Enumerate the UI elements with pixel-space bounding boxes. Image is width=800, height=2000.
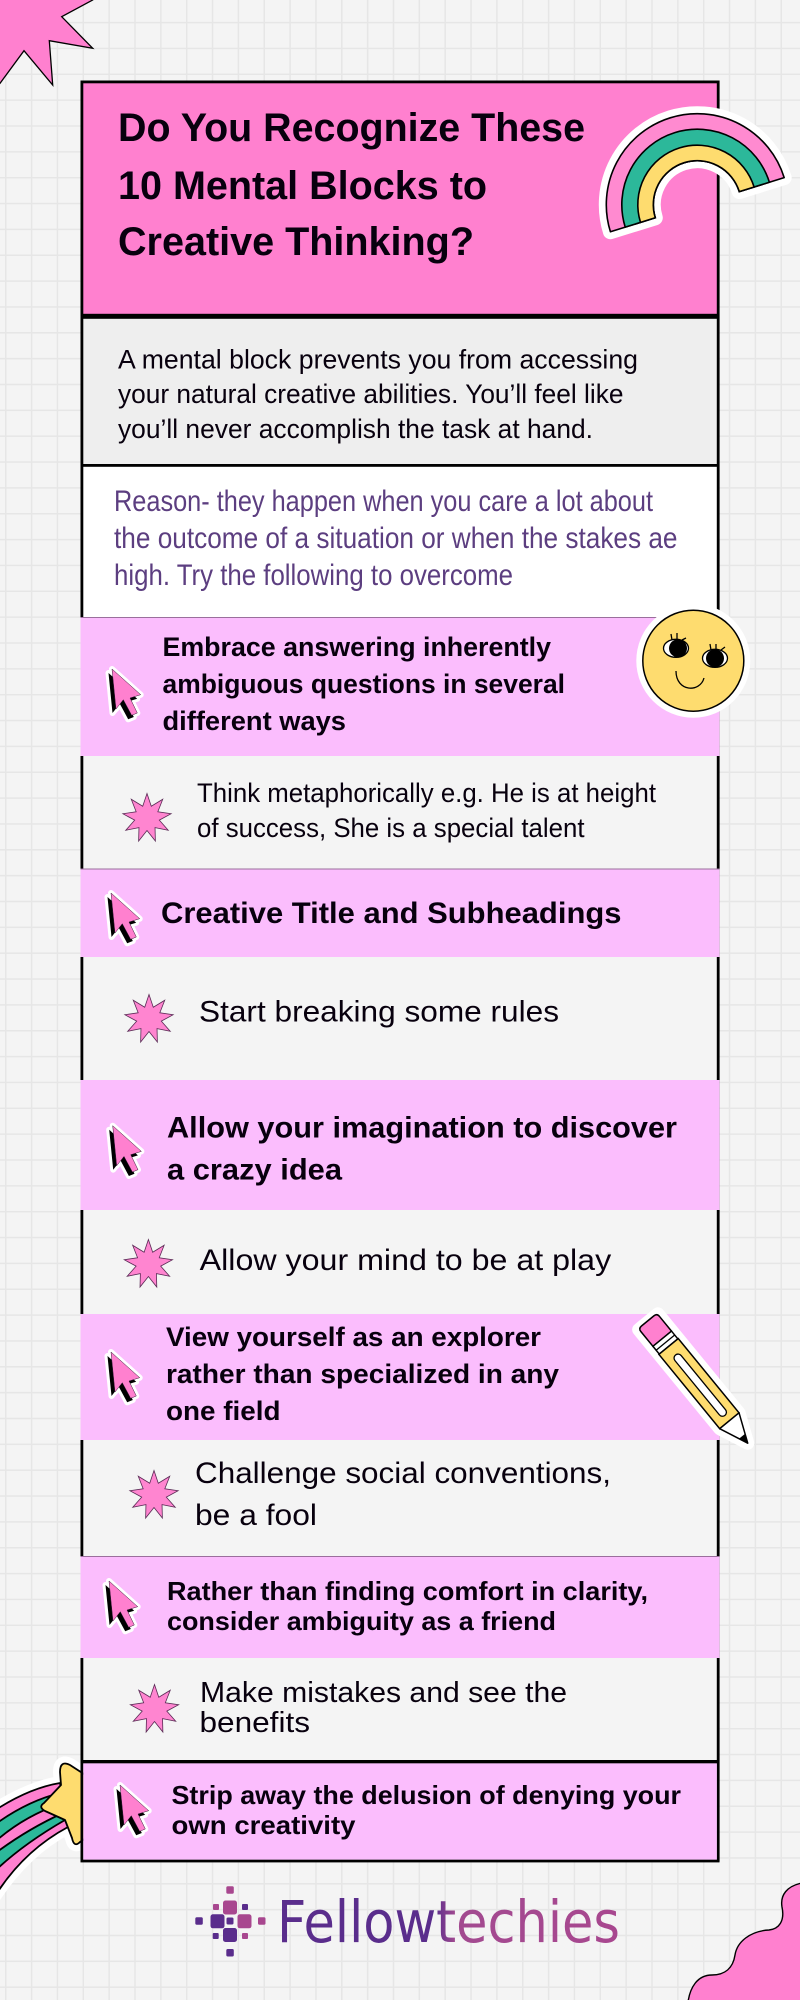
tip heading: rather than specialized in any xyxy=(166,1359,559,1389)
tip heading: Creative Title and Subheadings xyxy=(161,897,622,930)
icon: logo mark xyxy=(195,1886,266,1956)
tip heading: one field xyxy=(166,1396,280,1426)
tip 4 xyxy=(108,1322,611,1532)
icon: burst xyxy=(125,994,173,1042)
reason text xyxy=(114,485,678,592)
tip detail: of success, She is a special talent xyxy=(197,813,585,843)
tip 1 xyxy=(108,632,657,843)
logo: Fellowtechies xyxy=(195,1886,620,1956)
reason text: the outcome of a situation or when the stakes ae xyxy=(114,522,678,555)
intro text: your natural creative abilities. You’ll feel like xyxy=(118,379,624,409)
reason text: high. Try the following to overcome xyxy=(114,559,513,592)
icon: burst xyxy=(130,1470,178,1518)
icon: cursor xyxy=(116,1785,149,1835)
panel: tip detail backgrounds xyxy=(81,756,719,1762)
tip heading xyxy=(167,1576,648,1636)
reason text: Reason- they happen when you care a lot about xyxy=(114,485,654,518)
tip detail: Make mistakes and see the xyxy=(200,1677,567,1709)
tip 6 xyxy=(116,1780,681,1840)
tip detail xyxy=(200,1677,567,1739)
tip detail xyxy=(195,1457,611,1532)
icon: burst xyxy=(124,1240,173,1287)
icon: burst xyxy=(130,1684,179,1732)
top-left starburst decoration xyxy=(0,0,99,90)
tip heading: View yourself as an explorer xyxy=(166,1322,541,1352)
tip detail: Start breaking some rules xyxy=(199,996,559,1028)
panel: title background xyxy=(81,81,719,316)
tip heading: Strip away the delusion of denying your xyxy=(172,1780,681,1810)
tip heading: Rather than finding comfort in clarity, xyxy=(167,1576,648,1606)
intro text: you’ll never accomplish the task at hand. xyxy=(118,414,593,444)
tip heading: different ways xyxy=(162,706,346,736)
title: 10 Mental Blocks to xyxy=(118,164,487,208)
icon: pencil sticker xyxy=(638,1313,757,1451)
tip heading: own creativity xyxy=(172,1810,356,1840)
tip 5 xyxy=(106,1576,648,1739)
tip heading xyxy=(172,1780,681,1840)
panel: tip heading backgrounds xyxy=(80,618,720,1860)
tip 3 xyxy=(109,1112,678,1287)
title xyxy=(118,106,585,264)
icon: burst xyxy=(123,794,171,841)
icon: smiley sticker xyxy=(636,604,750,718)
title: Do You Recognize These xyxy=(118,106,585,150)
icon: cursor xyxy=(108,893,140,943)
tip heading xyxy=(167,1112,678,1186)
tip heading: ambiguous questions in several xyxy=(162,669,565,699)
intro text xyxy=(118,344,638,444)
tip detail: Allow your mind to be at play xyxy=(200,1244,611,1277)
tip heading: Allow your imagination to discover xyxy=(167,1112,678,1145)
tip detail: be a fool xyxy=(195,1499,317,1532)
title: Creative Thinking? xyxy=(118,220,474,264)
panel: reason background xyxy=(81,465,719,618)
tip detail: benefits xyxy=(200,1707,310,1739)
icon: cursor xyxy=(108,669,141,719)
tip heading: Embrace answering inherently xyxy=(162,632,551,662)
intro text: A mental block prevents you from accessing xyxy=(118,344,638,374)
tip 2 xyxy=(108,893,622,1042)
tip heading xyxy=(166,1322,559,1426)
icon: cursor xyxy=(109,1126,141,1176)
bottom-right pink blob decoration xyxy=(688,1883,800,2000)
icon: cursor xyxy=(108,1352,140,1402)
icon: cursor xyxy=(106,1581,138,1631)
frame lines xyxy=(80,80,720,1862)
icon: rainbow sticker xyxy=(583,91,784,232)
tip heading: consider ambiguity as a friend xyxy=(167,1606,556,1636)
tip detail: Challenge social conventions, xyxy=(195,1457,611,1490)
tip detail: Think metaphorically e.g. He is at height xyxy=(197,778,657,808)
row separators xyxy=(80,617,720,1557)
main panel stack xyxy=(80,80,720,1862)
tip heading: a crazy idea xyxy=(167,1153,343,1186)
tip detail xyxy=(197,778,657,843)
shooting star decoration xyxy=(0,1764,90,1895)
panel: intro background xyxy=(81,316,719,466)
logo wordmark: Fellowtechies xyxy=(277,1888,620,1956)
tip heading xyxy=(162,632,565,736)
